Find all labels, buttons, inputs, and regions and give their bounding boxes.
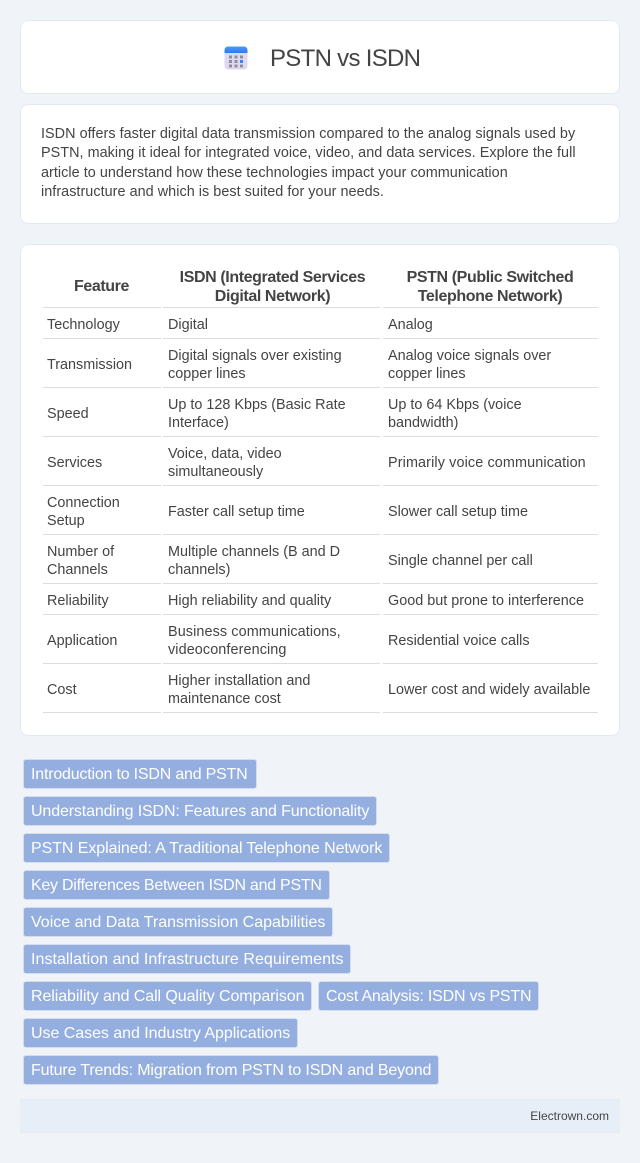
row: Speed: Up to 64 Kbps (voice xyxy=(388,397,522,413)
tag: Voice and Data Transmission Capabilities xyxy=(31,914,325,931)
tag xyxy=(23,1018,298,1048)
row: Connection Setup: Setup xyxy=(47,513,85,529)
row: Transmission: Digital signals over existing xyxy=(168,348,342,364)
intro text: infrastructure and which is best suited for your needs. xyxy=(41,184,384,200)
row: Speed: Interface) xyxy=(168,415,229,431)
row: Services: Primarily voice communication xyxy=(388,455,586,471)
tag: Introduction to ISDN and PSTN xyxy=(31,766,248,783)
row: Cost: Higher installation and xyxy=(168,673,310,689)
row: Transmission: Analog voice signals over xyxy=(388,348,551,364)
row: Reliability: High reliability and quality xyxy=(168,593,331,609)
row: Application: Application xyxy=(47,633,117,649)
tag xyxy=(23,1055,439,1085)
row: Services xyxy=(47,446,586,480)
row: Application xyxy=(47,624,530,658)
icon: calendar xyxy=(224,46,248,70)
row: Cost: maintenance cost xyxy=(168,691,281,707)
row: Transmission: copper lines xyxy=(168,366,246,382)
table header: Feature xyxy=(74,278,129,295)
tag xyxy=(23,870,330,900)
footer bar xyxy=(20,1099,620,1133)
tag xyxy=(23,944,351,974)
table header: Telephone Network) xyxy=(418,288,562,305)
comparison table panel xyxy=(20,244,620,736)
row: Cost: Cost xyxy=(47,682,77,698)
tag: Installation and Infrastructure Requirements xyxy=(31,951,344,968)
row: Cost xyxy=(47,673,590,707)
row: Technology: Analog xyxy=(388,317,433,333)
tag: PSTN Explained: A Traditional Telephone Network xyxy=(31,840,382,857)
tag xyxy=(318,981,539,1011)
tag xyxy=(23,833,390,863)
intro card xyxy=(20,104,620,224)
row: Technology: Technology xyxy=(47,317,120,333)
row: Services: Services xyxy=(47,455,102,471)
row: Number of Channels: Channels xyxy=(47,562,108,578)
row: Technology: Digital xyxy=(168,317,208,333)
row: Speed xyxy=(47,397,522,431)
row: Services: simultaneously xyxy=(168,464,263,480)
table header: Digital Network) xyxy=(215,288,330,305)
tag: Key Differences Between ISDN and PSTN xyxy=(31,877,322,894)
footer credit: Electrown.com xyxy=(530,1109,609,1123)
row: Application: Residential voice calls xyxy=(388,633,530,649)
tag: Use Cases and Industry Applications xyxy=(31,1025,290,1042)
row: Reliability: Good but prone to interference xyxy=(388,593,584,609)
intro text xyxy=(41,126,576,200)
intro text: ISDN offers faster digital data transmission compared to the analog signals used by xyxy=(41,126,575,142)
intro text: PSTN, making it ideal for integrated voice, video, and data services. Explore the full xyxy=(41,145,576,161)
row: Speed: bandwidth) xyxy=(388,415,458,431)
row: Technology xyxy=(47,317,433,333)
intro text: article to understand how these technologies impact your communication xyxy=(41,165,508,181)
row: Connection Setup: Connection xyxy=(47,495,120,511)
tag xyxy=(23,759,257,789)
tag xyxy=(23,796,377,826)
tag: Understanding ISDN: Features and Functionality xyxy=(31,803,369,820)
row: Cost: Lower cost and widely available xyxy=(388,682,590,698)
title: PSTN vs ISDN xyxy=(270,45,420,72)
row: Speed: Up to 128 Kbps (Basic Rate xyxy=(168,397,346,413)
row: Reliability xyxy=(47,593,584,609)
row: Transmission xyxy=(47,348,551,382)
tag xyxy=(23,981,312,1011)
topic tags xyxy=(23,759,539,1085)
table header: PSTN (Public Switched xyxy=(407,269,573,286)
table header: ISDN (Integrated Services xyxy=(180,269,365,286)
row: Speed: Speed xyxy=(47,406,89,422)
row: Transmission: copper lines xyxy=(388,366,466,382)
row: Reliability: Reliability xyxy=(47,593,109,609)
tag: Future Trends: Migration from PSTN to ISDN and Beyond xyxy=(31,1062,431,1079)
row: Number of Channels xyxy=(47,544,533,578)
table header xyxy=(74,269,573,305)
row: Number of Channels: Single channel per call xyxy=(388,553,533,569)
header card xyxy=(20,20,620,94)
row: Connection Setup: Slower call setup time xyxy=(388,504,528,520)
row: Application: Business communications, xyxy=(168,624,341,640)
row: Number of Channels: Number of xyxy=(47,544,114,560)
row: Transmission: Transmission xyxy=(47,357,132,373)
row: Number of Channels: channels) xyxy=(168,562,230,578)
row: Number of Channels: Multiple channels (B and D xyxy=(168,544,340,560)
tag: Cost Analysis: ISDN vs PSTN xyxy=(326,988,531,1005)
row: Services: Voice, data, video xyxy=(168,446,282,462)
row: Application: videoconferencing xyxy=(168,642,287,658)
row: Connection Setup xyxy=(47,495,528,529)
tag xyxy=(23,907,333,937)
tag: Reliability and Call Quality Comparison xyxy=(31,988,304,1005)
row: Connection Setup: Faster call setup time xyxy=(168,504,305,520)
